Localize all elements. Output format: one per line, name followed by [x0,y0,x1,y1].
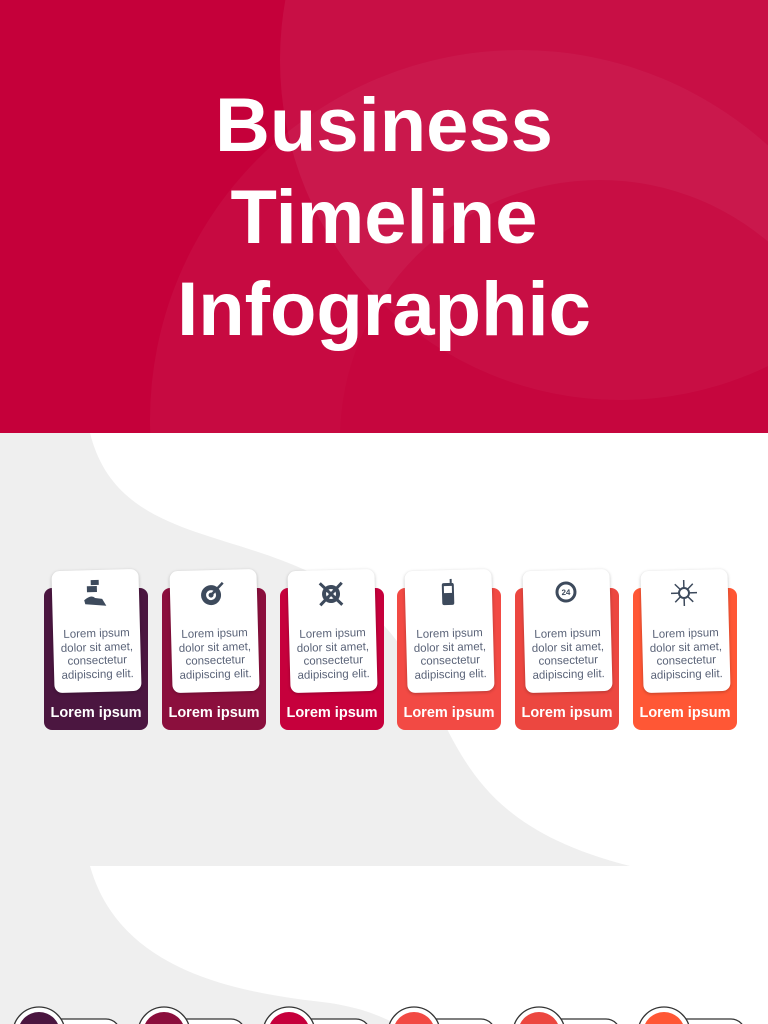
timeline cards: Lorem ipsum [50,705,142,721]
timeline cards: Lorem ipsum dolor sit amet, consectetur adipiscing elit. [179,627,252,682]
title [177,83,591,352]
timeline cards: Lorem ipsum dolor sit amet, consectetur adipiscing elit. [414,627,487,682]
card 1 [44,568,148,730]
timeline cards: 24 [561,588,571,597]
card 5 [515,568,619,730]
title: Business [215,83,553,168]
title: Timeline [231,175,537,260]
header background [0,0,768,433]
timeline cards [44,568,737,730]
timeline cards: Lorem ipsum dolor sit amet, consectetur adipiscing elit. [650,627,723,682]
card 6 [633,568,737,730]
timeline cards: Lorem ipsum [168,705,260,721]
timeline cards: Lorem ipsum [639,705,731,721]
timeline cards: Lorem ipsum [403,705,495,721]
bottom timeline nodes [14,1006,742,1024]
card 3 [280,568,384,730]
timeline cards: Lorem ipsum dolor sit amet, consectetur adipiscing elit. [61,627,134,682]
section background [0,433,629,1024]
timeline cards: Lorem ipsum dolor sit amet, consectetur adipiscing elit. [297,627,370,682]
card 2 [162,568,266,730]
title: Infographic [177,267,591,352]
timeline cards: Lorem ipsum dolor sit amet, consectetur adipiscing elit. [532,627,605,682]
card 4 [397,568,501,730]
timeline cards: Lorem ipsum [521,705,613,721]
timeline cards: Lorem ipsum [286,705,378,721]
